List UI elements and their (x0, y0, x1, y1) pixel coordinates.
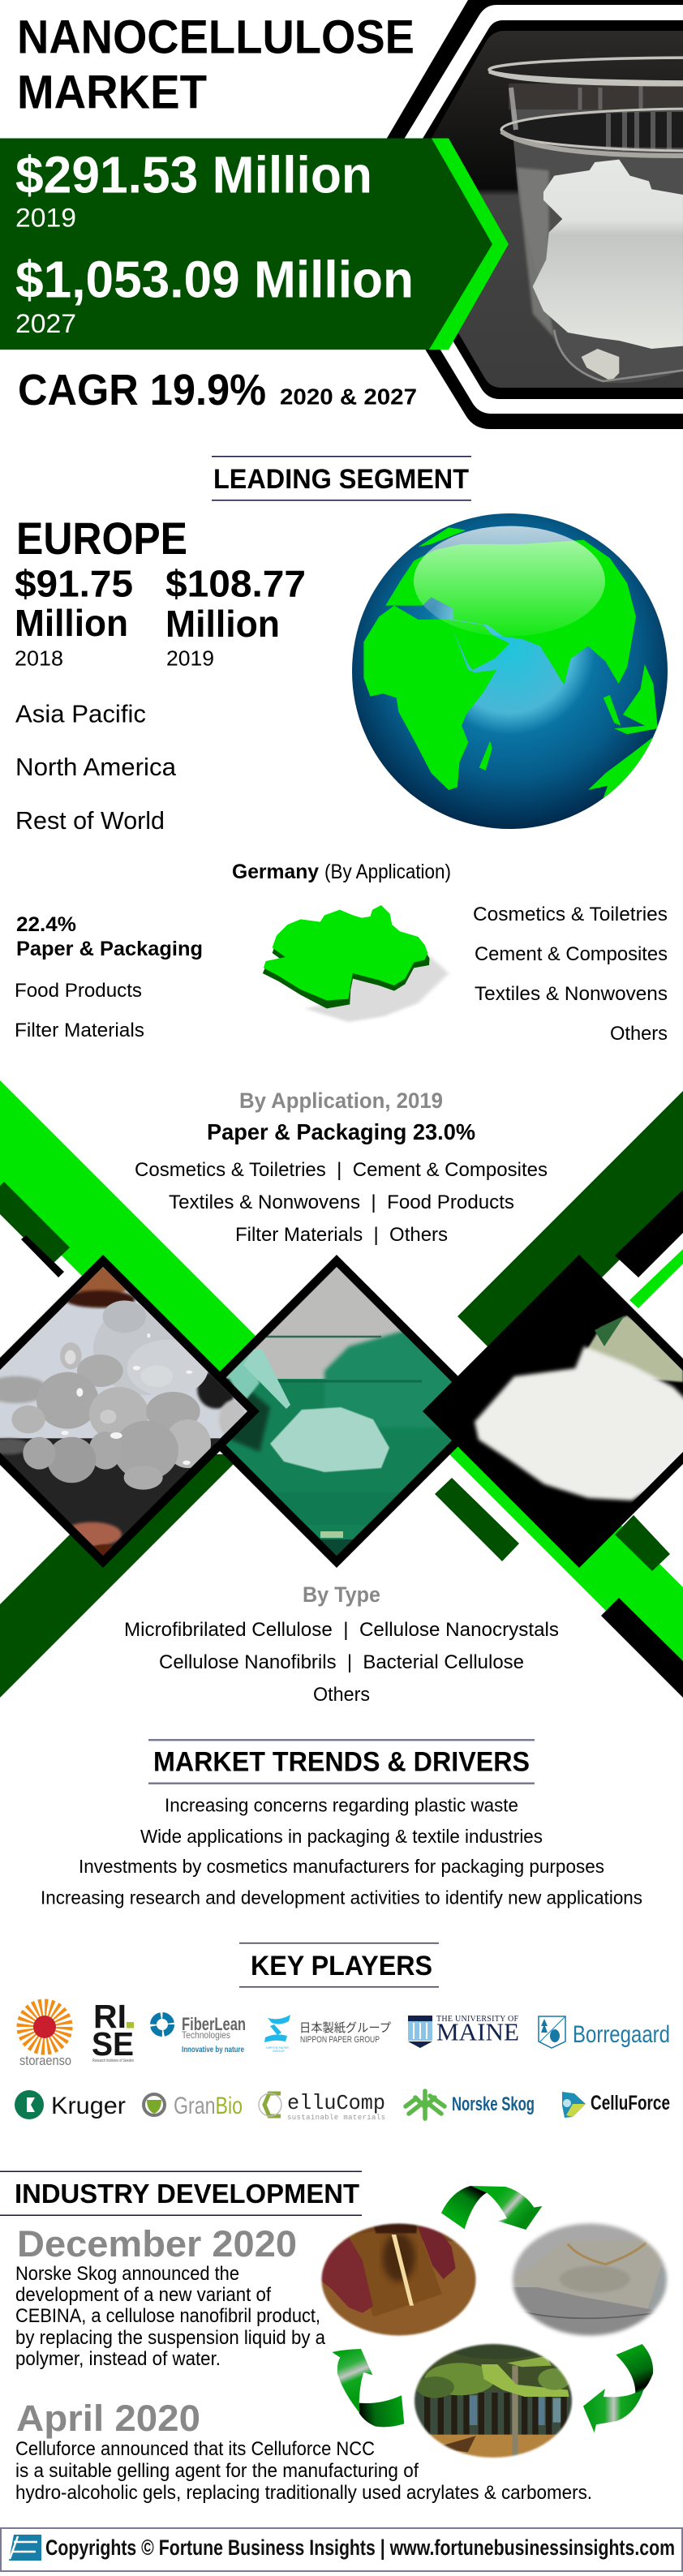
Europe stats: 2018 (15, 646, 63, 670)
Europe stats: EUROPE (16, 513, 187, 564)
development: December 2020: December 2020 (17, 2223, 297, 2265)
logo: Norske Skog: Norske Skog (452, 2093, 535, 2115)
logo: University of Maine: THE UNIVERSITY OF (436, 2015, 518, 2024)
title: MARKET (17, 67, 207, 118)
logo: RISE: Research Institutes of Sweden (92, 2059, 134, 2063)
year 2019: 2019 (15, 203, 76, 232)
logo: University of Maine (408, 2015, 519, 2048)
Europe stats: Million (165, 603, 280, 645)
logo: Fortune Business Insights (9, 2535, 41, 2561)
arrow accent chevron (429, 138, 509, 350)
heading: Germany: Germany (232, 861, 319, 883)
pipette tip (243, 1349, 290, 1409)
development: December 2020 (15, 2223, 326, 2370)
cup contents (517, 160, 683, 381)
By Type block: By Type (303, 1582, 380, 1607)
development: April 2020 (15, 2398, 592, 2504)
CAGR: 2020 & 2027 (280, 384, 417, 409)
market drivers list: Increasing concerns regarding plastic waste (165, 1794, 518, 1815)
other regions: Asia Pacific (15, 699, 146, 728)
globe highlight (414, 526, 605, 636)
Germany right list: Cement & Composites (475, 943, 668, 965)
value 2027: $1,053.09 Million (15, 250, 414, 308)
development: December 2020: Norske Skog announced the (15, 2263, 239, 2285)
cup body haze (509, 87, 683, 383)
logo: FiberLean: Technologies (182, 2029, 230, 2041)
heading: key players: KEY PLAYERS (251, 1951, 432, 1981)
logo: Nippon Paper Group: NIPPON PAPER GROUP (300, 2035, 380, 2045)
Europe stats (15, 513, 306, 670)
market drivers list: Wide applications in packaging & textile industries (140, 1826, 543, 1847)
logo: RISE: RI (93, 1998, 127, 2035)
development: April 2020: hydro-alcoholic gels, replacing traditionally used acrylates & carbomers. (15, 2482, 592, 2504)
logo: Norske Skog (406, 2091, 535, 2119)
Germany left list: 22.4% (16, 913, 76, 936)
Germany right list: Cosmetics & Toiletries (473, 904, 668, 925)
other regions: Rest of World (15, 806, 165, 835)
market drivers list: Investments by cosmetics manufacturers for packaging purposes (79, 1856, 604, 1877)
Germany left list: Paper & Packaging (16, 938, 203, 960)
heading: Germany: (By Application) (324, 861, 451, 883)
photo circle: film held in hands (320, 2222, 477, 2338)
market size arrow banner (0, 138, 509, 350)
By Type block (124, 1582, 559, 1706)
logo: Borregaard (539, 2016, 670, 2048)
logo: RISE (92, 1998, 134, 2063)
icon: globe (352, 513, 668, 829)
heading: industry development: INDUSTRY DEVELOPMENT (15, 2179, 359, 2209)
arrow: right cycle (583, 2344, 653, 2432)
market drivers list: Increasing research and development activities to identify new applications (41, 1887, 642, 1908)
logo: Nippon Paper Group: 日本製紙グループ (299, 2019, 391, 2036)
By Application block: Paper & Packaging 23.0% (207, 1119, 475, 1144)
logo: Nippon Paper Group (264, 2015, 391, 2053)
CAGR (18, 366, 417, 414)
logo: FiberLean: Innovative by nature (182, 2046, 244, 2054)
other regions: North America (15, 753, 177, 781)
Europe stats: $108.77 (165, 563, 306, 605)
icon: Germany map (263, 905, 449, 1022)
year 2027: 2027 (15, 309, 76, 338)
Germany left list: Food Products (15, 980, 142, 1002)
logo: Nippon Paper Group: NIPPON PAPER (266, 2046, 289, 2050)
logo: CelluComp (259, 2091, 385, 2122)
Germany left list: Filter Materials (15, 1020, 144, 1041)
title (17, 11, 415, 118)
Europe stats: Million (15, 602, 128, 644)
By Type block: Microfibrilated Cellulose | Cellulose Nanocrystals (124, 1619, 559, 1641)
photo circle: cellulose sheet (510, 2221, 669, 2338)
By Type block: Cellulose Nanofibrils | Bacterial Cellulose (159, 1651, 524, 1673)
footer (1, 2528, 682, 2571)
logo: GranBio: GranBio (174, 2093, 243, 2119)
Germany right list: Textiles & Nonwovens (475, 983, 668, 1005)
cup rims (489, 58, 683, 156)
By Application block: Cosmetics & Toiletries | Cement & Composites (135, 1159, 548, 1181)
development: December 2020: polymer, instead of water. (15, 2348, 221, 2370)
logo: Stora Enso (19, 2007, 71, 2068)
Germany right list (473, 904, 668, 1045)
development: December 2020: CEBINA, a cellulose nanofibril product, (15, 2305, 320, 2327)
other regions (15, 699, 177, 835)
By Application block: By Application, 2019 (239, 1088, 443, 1113)
photo circle: pine forest (413, 2342, 573, 2459)
diamond photo: white powder (423, 1255, 683, 1568)
development: April 2020: is a suitable gelling agent for the manufacturing of (15, 2460, 419, 2482)
Europe stats: $91.75 (15, 563, 133, 605)
Europe stats: 2019 (166, 646, 214, 670)
By Application block (135, 1088, 548, 1246)
By Type block: Others (313, 1684, 370, 1706)
development: December 2020: development of a new variant of (15, 2284, 271, 2306)
logo: Kruger (15, 2090, 126, 2119)
logo: FiberLean (153, 2014, 246, 2054)
decorative diagonal bands (0, 1080, 683, 1698)
logo: Stora Enso: storaenso (19, 2053, 71, 2068)
market drivers list (41, 1794, 642, 1908)
arrow: top cycle (441, 2186, 542, 2230)
value 2019: $291.53 Million (15, 146, 372, 204)
CAGR: CAGR 19.9% (18, 366, 266, 414)
diamond photo: nanocellulose crystals (0, 1255, 260, 1568)
logo: GranBio (144, 2093, 243, 2119)
development: April 2020: Celluforce announced that its Celluforce NCC (15, 2438, 375, 2460)
Germany right list: Others (610, 1023, 668, 1045)
development: April 2020: April 2020 (16, 2398, 200, 2439)
arrow: left cycle (332, 2349, 404, 2427)
logo: Kruger: Kruger (51, 2093, 126, 2119)
logo: FiberLean: FiberLean (182, 2014, 246, 2034)
By Application block: Filter Materials | Others (235, 1224, 448, 1246)
logo: University of Maine: MAINE (436, 2018, 519, 2046)
logo: Nippon Paper Group: GROUP (273, 2049, 285, 2053)
gel blob (270, 1407, 389, 1472)
By Application block: Textiles & Nonwovens | Food Products (169, 1191, 514, 1213)
heading: market trends & drivers: MARKET TRENDS & DRIVERS (153, 1747, 530, 1778)
heading: leading segment: LEADING SEGMENT (213, 464, 469, 495)
heading: Germany (232, 861, 451, 883)
hexagon photo frame: cup of nanocellulose (387, 0, 683, 429)
logo: RISE: SE (92, 2025, 134, 2063)
diamond photo: gel sample in dish (220, 1255, 457, 1568)
Germany left list (15, 913, 203, 1041)
logo: CelluForce (562, 2092, 670, 2118)
logo: CelluComp: sustainable materials (287, 2114, 385, 2122)
logo: CelluComp: elluComp (287, 2091, 385, 2115)
development: December 2020: by replacing the suspension liquid by a (15, 2327, 326, 2349)
title: NANOCELLULOSE (17, 11, 415, 63)
